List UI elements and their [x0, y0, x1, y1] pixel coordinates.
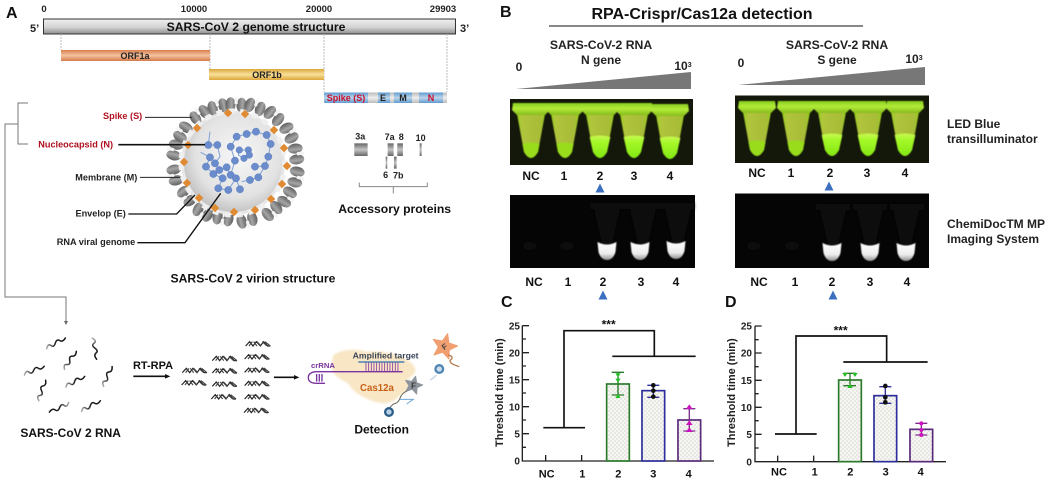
amplified DNA copies [182, 342, 270, 413]
label: Cas12a: Cas12a [360, 383, 395, 394]
y axis labels: 25 [741, 322, 752, 333]
RNA genome beads [201, 128, 274, 194]
panel B: RPA-Crispr/Cas12a detection [500, 4, 1045, 300]
RNA strands [24, 338, 118, 412]
bar 4 [910, 421, 933, 462]
y axis labels [509, 321, 520, 467]
heading: RPA-Crispr/Cas12a detection [591, 6, 813, 23]
lane labels N row 2: NC [525, 275, 543, 289]
y axis title: Threshold time (min) [494, 338, 506, 447]
genome coordinate labels: 0 [41, 4, 47, 15]
structural genes bar: Spike (S) [327, 93, 365, 103]
accessory proteins diagram: Accessory proteins [338, 202, 451, 216]
lane labels S row 1: 1 [788, 166, 795, 180]
N gene header: 0 [516, 60, 523, 74]
lane labels N row 1: 4 [667, 169, 674, 183]
panel letter A: A [6, 5, 18, 22]
significance bracket: *** [834, 323, 848, 337]
genome structure bar: SARS-CoV 2 genome structure [167, 20, 346, 34]
structural genes bar: N [428, 93, 434, 103]
S gene header: 3 [919, 55, 923, 62]
label: Envelop: Envelop (E) [75, 209, 126, 219]
detection illustration [308, 334, 459, 437]
label: SARS-CoV 2 RNA: SARS-CoV 2 RNA [20, 426, 121, 440]
S gene header: 0 [738, 56, 745, 70]
arrow: RT-RPA [133, 374, 170, 379]
arrow: to detection [274, 375, 299, 380]
S gene header: 10 [905, 52, 919, 66]
significance bracket: *** [602, 318, 616, 332]
label: ChemiDoc imaging system: ChemiDocTM MP [947, 217, 1045, 231]
photo: S gene ChemiDoc [735, 194, 929, 268]
lane labels S row 2: 1 [792, 275, 799, 289]
genome coordinate labels: 29903 [430, 4, 456, 15]
y axis labels: 25 [509, 321, 520, 332]
panel letter D: D [725, 294, 737, 311]
x axis labels: 1 [812, 467, 818, 479]
label: LED Blue transilluminator: transilluminator [947, 132, 1038, 146]
N gene header: N gene [581, 53, 621, 67]
label: RNA viral genome: RNA viral genome [57, 237, 135, 247]
significance bracket [543, 318, 696, 428]
chart C: N gene threshold time [494, 318, 714, 480]
S gene header: S gene [817, 53, 857, 67]
virion labels and leader lines [38, 111, 451, 285]
label: ChemiDoc imaging system [947, 217, 1045, 246]
axes [522, 326, 714, 462]
x axis labels: NC [771, 467, 787, 479]
label: Nucleocapsid: Nucleocapsid (N) [38, 139, 113, 149]
arrow: RNA selection [64, 321, 68, 325]
accessory proteins diagram: 6 [383, 170, 388, 180]
lane labels S row 2: 3 [867, 275, 874, 289]
label: Membrane: Membrane (M) [75, 173, 137, 183]
x axis labels: 3 [883, 467, 889, 479]
x axis labels [539, 468, 693, 480]
structural genes bar: M [399, 93, 407, 103]
genome structure bar: 3’ [460, 23, 469, 35]
significance bracket [775, 323, 928, 434]
genome coordinate labels: 20000 [306, 4, 332, 15]
icon: released fluorophore star: F [440, 342, 449, 352]
axes [754, 326, 946, 462]
accessory proteins diagram: 3a [355, 132, 366, 142]
lane labels N row 1: 1 [561, 169, 568, 183]
panel A: genome and virion [5, 4, 469, 325]
ORF1a bar: ORF1a [120, 51, 150, 61]
y axis labels: 20 [509, 348, 520, 359]
lane labels S row 2: NC [750, 275, 768, 289]
lane labels N row 2: 3 [638, 275, 645, 289]
icon: released fluorophore star [430, 334, 459, 380]
lane labels N row 1: 3 [631, 169, 638, 183]
accessory proteins diagram: 10 [416, 133, 426, 143]
lane labels S row 1: 4 [902, 166, 909, 180]
photo: N gene blue transilluminator tubes [510, 99, 693, 165]
accessory proteins diagram: 8 [399, 132, 404, 142]
photo: S gene blue transilluminator tubes [735, 96, 929, 163]
y axis labels [741, 322, 752, 468]
icon: quenched fluorophore star: F [411, 382, 416, 391]
N gene header: 3 [688, 62, 692, 69]
label: Detection: Detection [354, 423, 409, 437]
bar 2 [607, 372, 629, 461]
ORF1a bar [61, 50, 210, 61]
accessory proteins diagram: 7a [385, 132, 396, 142]
y axis labels: 0 [514, 456, 520, 467]
genome structure bar [30, 19, 469, 35]
N gene header: SARS-CoV-2 RNA [550, 38, 652, 52]
lane labels S row 2 [750, 275, 911, 289]
lane labels N row 1: NC [522, 169, 540, 183]
spikes [165, 96, 306, 230]
bar 3 [874, 384, 897, 462]
label: LED Blue transilluminator: LED Blue [947, 117, 1001, 131]
bar 2 [839, 373, 861, 462]
x axis labels [771, 467, 925, 479]
chart D: S gene threshold time [726, 322, 946, 479]
arrowheads row 1 [596, 182, 834, 192]
genome coordinate labels: 10000 [181, 4, 207, 15]
label: Spike [103, 111, 192, 121]
virion illustration [165, 96, 306, 230]
lane labels S row 1: 2 [827, 166, 834, 180]
x axis labels: 2 [615, 468, 621, 480]
y axis labels: 15 [741, 376, 752, 387]
ORF1b bar [209, 69, 324, 80]
label: Amplified target: Amplified target [353, 350, 419, 360]
x axis labels: 3 [650, 468, 656, 480]
accessory proteins diagram: 7b [393, 170, 404, 180]
genome coordinate labels [41, 4, 456, 15]
lane labels N row 2: 4 [673, 275, 680, 289]
lane labels S row 1 [748, 166, 909, 180]
y axis labels: 0 [746, 457, 752, 468]
N gene header [516, 38, 692, 89]
y axis labels: 5 [514, 429, 520, 440]
label: Envelop [75, 195, 195, 219]
label: crRNA: crRNA [311, 361, 335, 370]
icon: quenched fluorophore star [384, 376, 423, 417]
accessory proteins diagram [338, 132, 451, 216]
S gene header [738, 38, 925, 85]
y axis title: Threshold time (min) [726, 338, 738, 447]
workflow: RNA to detection [20, 334, 459, 440]
lane labels S row 1: 3 [864, 166, 871, 180]
S gene header: SARS-CoV-2 RNA [786, 38, 888, 52]
photo: N gene ChemiDoc [510, 195, 695, 268]
lane labels N row 1 [522, 169, 674, 183]
x axis labels: 4 [686, 468, 693, 480]
bar 4 [678, 404, 701, 461]
lane labels N row 1: 2 [597, 169, 604, 183]
label: LED Blue transilluminator [947, 117, 1038, 146]
ORF1b bar: ORF1b [252, 70, 282, 80]
lane labels S row 2: 2 [829, 275, 836, 289]
structural genes bar [324, 92, 447, 103]
envelope proteins [180, 109, 291, 216]
arrowheads row 2 [598, 290, 838, 300]
label: Spike: Spike (S) [103, 111, 142, 121]
panel letter C: C [501, 294, 513, 311]
label: RNA viral genome [57, 193, 221, 247]
y axis labels: 20 [741, 349, 752, 360]
x axis labels: 4 [918, 467, 925, 479]
panel letter B: B [500, 4, 512, 21]
y axis labels: 10 [509, 402, 520, 413]
lane labels S row 1: NC [748, 166, 766, 180]
x axis labels: 1 [579, 468, 585, 480]
lane labels S row 2: 4 [904, 275, 911, 289]
lane labels N row 2: 1 [565, 275, 572, 289]
x axis labels: NC [539, 468, 555, 480]
N gene header: 10 [674, 59, 688, 73]
y axis labels: 15 [509, 375, 520, 386]
label: RT-RPA: RT-RPA [133, 360, 173, 372]
lane labels N row 2: 2 [600, 275, 607, 289]
genome structure bar: 5’ [30, 23, 39, 35]
y axis labels: 10 [741, 403, 752, 414]
structural genes bar: E [380, 93, 386, 103]
y axis labels: 5 [746, 430, 752, 441]
x axis labels: 2 [847, 467, 853, 479]
label: ChemiDoc imaging system: Imaging System [947, 232, 1039, 246]
bar 3 [642, 383, 665, 461]
label: Membrane [75, 173, 180, 183]
heading: virion structure: SARS-CoV 2 virion structure [171, 271, 336, 285]
lane labels N row 2 [525, 275, 680, 289]
